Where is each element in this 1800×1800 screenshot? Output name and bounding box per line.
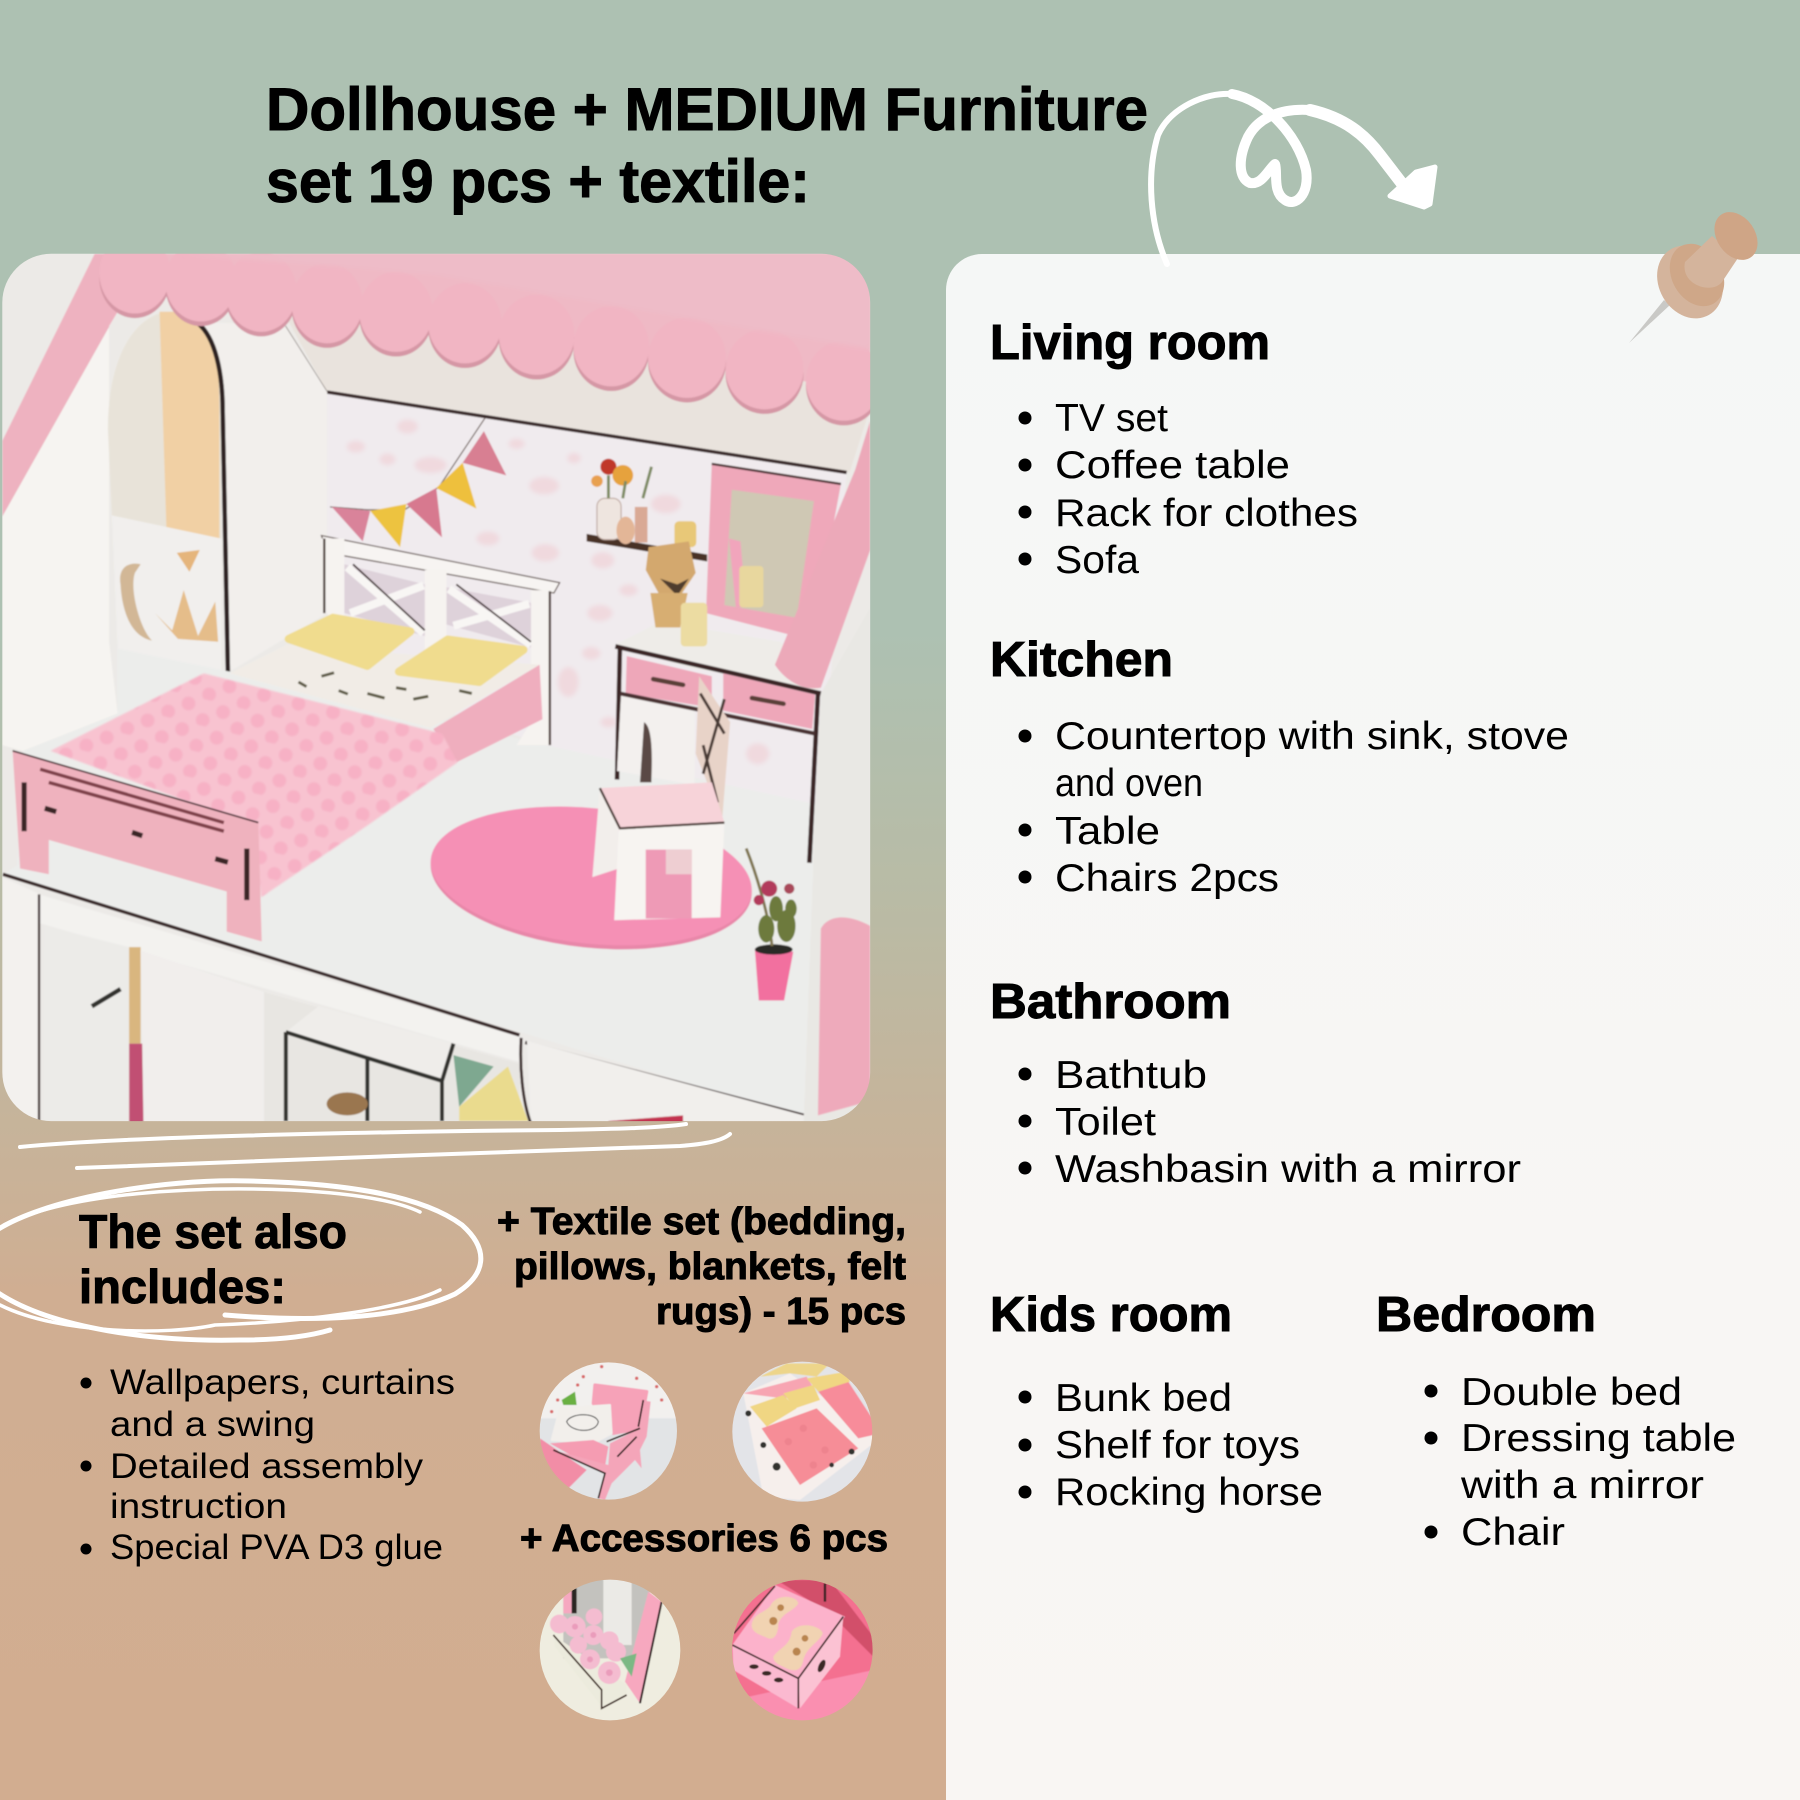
section: kids room: Shelf for toys	[1055, 1424, 1300, 1467]
section: kitchen	[990, 633, 1569, 900]
heading: textile set: rugs) - 15 pcs	[656, 1291, 906, 1333]
section: kitchen: Chairs 2pcs	[1055, 857, 1279, 900]
photo: chair with cushions	[540, 1362, 677, 1500]
section: bathroom	[990, 975, 1521, 1191]
section: living room: TV set	[1055, 397, 1168, 440]
section: kids room: Bunk bed	[1055, 1377, 1232, 1420]
title: set 19 pcs + textile:	[266, 148, 810, 215]
section: living room: Sofa	[1055, 539, 1139, 582]
section: bathroom: Bathroom	[990, 975, 1231, 1029]
section: living room: Living room	[990, 316, 1270, 370]
section: bathroom: Washbasin with a mirror	[1055, 1148, 1521, 1191]
wallpaper	[285, 326, 847, 805]
section: bathroom: Bathtub	[1055, 1054, 1207, 1097]
scribble underline	[20, 1124, 730, 1168]
floor front edge	[3, 874, 804, 1115]
section: kitchen: Kitchen	[990, 633, 1173, 687]
white side panel	[204, 325, 328, 394]
chair	[592, 676, 730, 920]
lower floor rooms	[37, 894, 804, 1122]
heading: the set also includes	[79, 1205, 347, 1313]
right pink roof end	[775, 421, 870, 688]
mirror	[706, 464, 841, 636]
left roof slope	[2, 254, 118, 516]
floor	[224, 670, 230, 673]
panel edge	[198, 323, 228, 672]
photo: folded textile	[730, 1360, 877, 1503]
dressing table	[615, 622, 821, 863]
list: set includes: Special PVA D3 glue	[110, 1528, 443, 1567]
shelf vases	[587, 459, 707, 561]
list: set includes: and a swing	[110, 1405, 315, 1444]
panel: room list	[946, 254, 1800, 1800]
title: Dollhouse + MEDIUM Furniture	[266, 76, 1148, 143]
headboard	[321, 536, 560, 745]
title	[266, 76, 1148, 215]
section: kids room	[990, 1288, 1323, 1514]
list: set includes: Wallpapers, curtains	[110, 1363, 455, 1402]
wooden flower and candle	[646, 541, 707, 646]
section: bedroom: with a mirror	[1460, 1464, 1704, 1507]
section: bathroom: Toilet	[1055, 1101, 1156, 1144]
arrow: curly white arrow	[1151, 94, 1435, 264]
heading: the set also includes: The set also	[79, 1205, 347, 1258]
potted plant	[746, 848, 797, 1001]
bunting	[330, 418, 506, 547]
scalloped roof	[100, 254, 870, 426]
section: kids room: Kids room	[990, 1288, 1232, 1342]
heading: textile set: + Textile set (bedding,	[497, 1201, 906, 1243]
section: bedroom: Double bed	[1461, 1371, 1682, 1414]
section: kitchen: Countertop with sink, stove	[1055, 715, 1569, 758]
section: bedroom: Dressing table	[1461, 1417, 1736, 1460]
photo: game controllers box	[730, 1577, 877, 1723]
section: bedroom	[1376, 1288, 1736, 1554]
left white wall	[2, 312, 118, 751]
sheet specks	[298, 673, 472, 699]
section: living room	[990, 316, 1358, 582]
section: living room: Coffee table	[1055, 444, 1290, 487]
section: kids room: Rocking horse	[1055, 1471, 1323, 1514]
arch opening	[108, 312, 221, 670]
section: bedroom: Bedroom	[1376, 1288, 1596, 1342]
right side wall	[816, 680, 830, 805]
mattress and sheet	[334, 665, 536, 671]
footboard	[13, 751, 262, 941]
photo: dollhouse bedroom	[0, 233, 900, 1140]
heading: the set also includes: includes:	[79, 1260, 286, 1313]
heading: accessories: + Accessories 6 pcs	[520, 1518, 888, 1560]
section: bedroom: Chair	[1461, 1511, 1565, 1554]
heading: textile set: pillows, blankets, felt	[514, 1246, 906, 1288]
icon: push pin	[1629, 204, 1766, 343]
heading: textile set	[497, 1201, 906, 1333]
right lower pink	[818, 917, 870, 1115]
bed side rail	[433, 665, 542, 762]
list: set includes	[80, 1363, 455, 1567]
section: kitchen: and oven	[1055, 762, 1203, 805]
blanket	[51, 673, 457, 897]
ceiling under roof	[290, 318, 866, 472]
section: living room: Rack for clothes	[1055, 492, 1358, 535]
photo: rose box	[537, 1577, 683, 1723]
section: kitchen: Table	[1055, 810, 1160, 853]
pillows	[289, 618, 523, 682]
scribble ellipse	[0, 1181, 481, 1340]
list: set includes: Detailed assembly	[110, 1447, 424, 1486]
rug	[430, 806, 753, 950]
list: set includes: instruction	[110, 1487, 287, 1526]
